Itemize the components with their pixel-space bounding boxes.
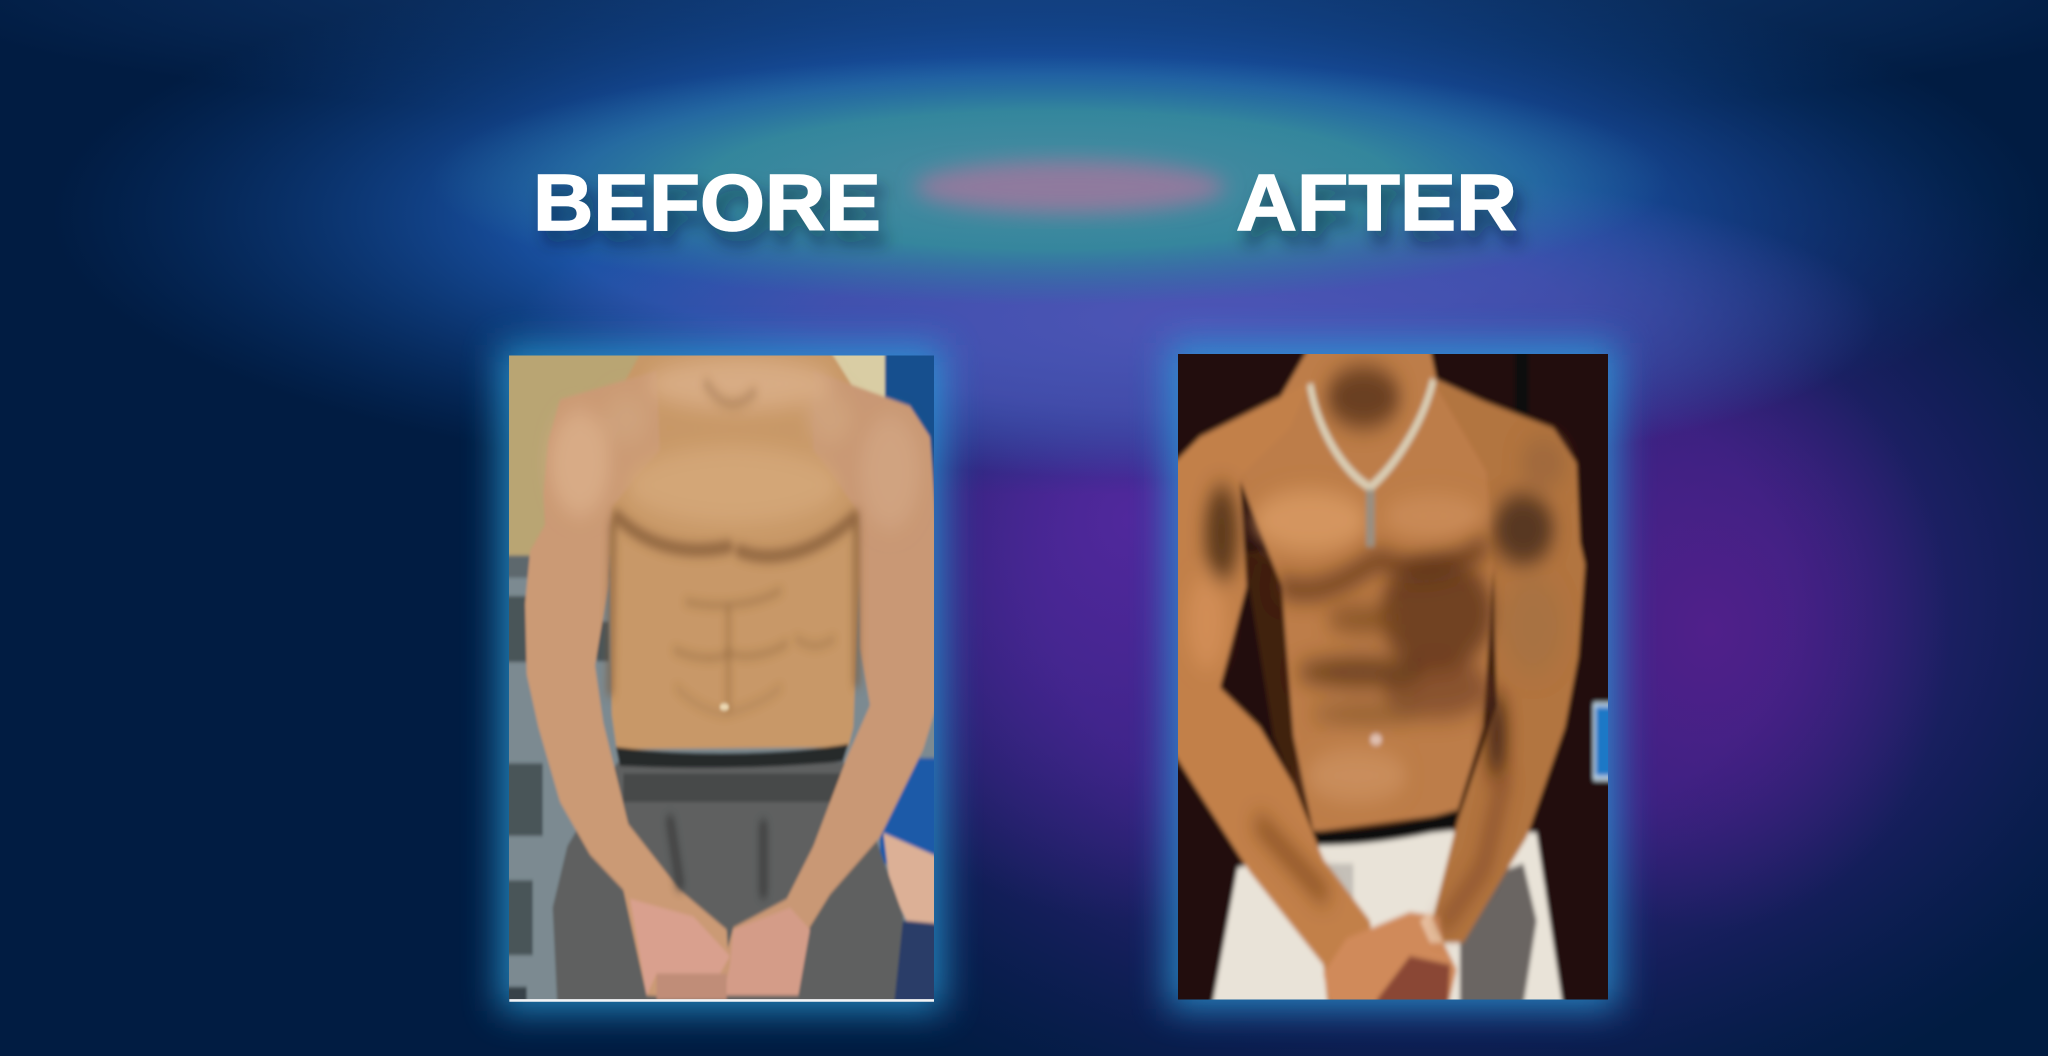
waistband <box>1307 810 1457 845</box>
muscle shadows <box>610 384 857 894</box>
right arm <box>1433 382 1585 943</box>
panel: before photo <box>509 356 934 1002</box>
left arm <box>1163 382 1383 1026</box>
shadowed body under arms <box>1243 551 1503 835</box>
waistband <box>616 744 848 768</box>
person in background arm <box>882 830 934 927</box>
grey shorts <box>553 762 903 1026</box>
glow: after photo <box>1168 343 1618 1009</box>
chest and shoulder highlights <box>550 358 920 529</box>
pec shadow lines <box>1260 547 1503 925</box>
navel <box>720 703 729 710</box>
glow: before photo <box>499 345 944 1011</box>
torso <box>610 340 860 749</box>
torso <box>1237 340 1523 832</box>
clasped hands <box>1323 912 1457 1026</box>
left arm <box>525 371 728 1000</box>
white shorts <box>1208 824 1567 1000</box>
panel: after photo <box>1178 354 1608 1000</box>
heading: before: BEFORE <box>533 158 881 247</box>
locker room wall <box>509 356 934 1000</box>
necklace with pendant <box>1310 380 1433 547</box>
white bottom edge <box>509 999 934 1002</box>
right arm <box>723 371 937 996</box>
locker vents <box>509 594 610 1000</box>
heading: after: AFTER <box>1236 158 1517 247</box>
hands <box>630 899 810 1000</box>
blue wall sign <box>1588 696 1608 786</box>
decorative pink ellipse highlight <box>915 161 1225 213</box>
dark door background <box>1178 354 1608 1000</box>
muscle shading <box>1187 366 1567 802</box>
navel <box>1370 734 1382 745</box>
